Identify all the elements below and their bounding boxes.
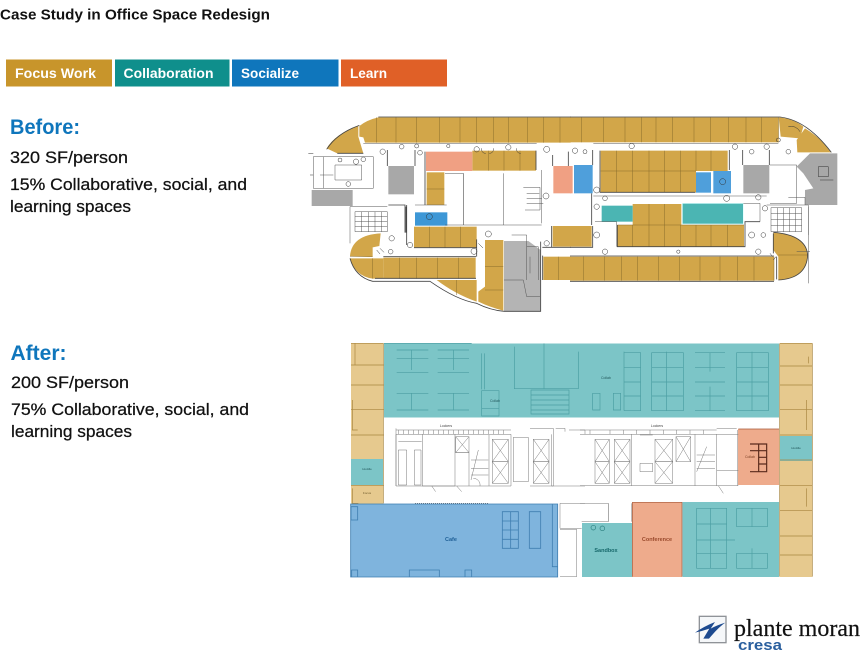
legend item: Focus Work: Focus Work	[15, 65, 96, 81]
east half line work	[580, 343, 812, 577]
west walls	[327, 117, 571, 311]
west core plan	[396, 428, 585, 577]
room labels: Focus	[363, 491, 372, 495]
east learn room edge	[570, 166, 573, 193]
floor plan: before	[308, 117, 837, 312]
cafe furniture	[351, 504, 558, 577]
stat: 15% collaborative: learning spaces	[10, 197, 131, 216]
west perimeter office lines	[351, 343, 384, 503]
heading: Before: Before:	[10, 116, 80, 139]
stat: 15% collaborative	[10, 175, 247, 216]
east office partitions	[582, 117, 808, 281]
east focus work offices	[570, 117, 831, 281]
room labels: Conference	[642, 537, 672, 543]
text block: after	[10, 342, 249, 441]
zone: focus work perimeter	[351, 343, 812, 577]
logo: plante moran cresa	[695, 616, 860, 651]
west socialize room	[415, 212, 447, 226]
room labels: Sandbox	[594, 548, 619, 554]
east collaboration rooms	[602, 203, 743, 224]
room labels: Collab	[745, 455, 755, 459]
legend item: Collaboration: Collaboration	[124, 65, 214, 81]
east workstation lines	[593, 352, 768, 568]
west workstation lines	[384, 343, 578, 416]
heading: After: After:	[10, 342, 66, 365]
stat: 75% collaborative	[11, 400, 249, 441]
zone: socialize cafe	[351, 504, 558, 577]
stat: 75% collaborative: 75% Collaborative, social, and	[11, 400, 249, 419]
east core plan	[580, 428, 738, 522]
legend item: Collaboration	[115, 60, 230, 86]
legend	[6, 60, 447, 86]
room labels	[362, 376, 801, 554]
floor plan: after	[351, 343, 812, 577]
zone fills	[351, 343, 812, 577]
legend item: Socialize	[232, 60, 338, 86]
room labels: Cafe	[445, 537, 457, 543]
legend item: Focus Work	[6, 60, 112, 86]
room labels: Huddle	[791, 446, 801, 450]
room edges	[632, 429, 779, 577]
plan east half	[570, 117, 837, 283]
stat: 320 SF/person: 320 SF/person	[10, 148, 128, 167]
zone: collaboration	[351, 344, 812, 577]
legend item: Learn: Learn	[350, 65, 387, 81]
east core areas	[743, 153, 837, 205]
room labels: Lockers	[440, 424, 452, 428]
plan west half	[308, 117, 571, 312]
room labels: Collab	[601, 376, 611, 380]
east walls	[570, 117, 831, 281]
title: Case Study in Office Space Redesign	[0, 8, 270, 24]
huddle booth furniture	[750, 444, 767, 472]
text block: before	[10, 116, 247, 216]
west focus work offices	[327, 117, 571, 311]
room labels: Lockers	[651, 424, 663, 428]
zone: learn	[632, 429, 779, 577]
room labels: Collab	[490, 399, 500, 403]
west core areas	[312, 166, 541, 312]
icon: logo mark	[695, 616, 726, 643]
east perimeter office lines	[780, 343, 812, 577]
west office partitions	[350, 117, 560, 295]
stat: 75% collaborative: learning spaces	[11, 422, 132, 441]
east corridor fixtures and stairs	[572, 126, 833, 283]
west corridor fixtures and stairs	[308, 143, 550, 297]
stat: 15% collaborative: 15% Collaborative, social, and	[10, 175, 247, 194]
legend item: Socialize: Socialize	[241, 65, 299, 81]
legend item: Learn	[341, 60, 447, 86]
east socialize rooms	[574, 165, 731, 193]
west half line work	[351, 343, 585, 577]
stat: 200 SF/person: 200 SF/person	[11, 373, 129, 392]
west learn rooms	[426, 152, 571, 193]
room labels: Huddle	[362, 467, 372, 471]
logo wordmark: plante moran	[734, 616, 860, 642]
